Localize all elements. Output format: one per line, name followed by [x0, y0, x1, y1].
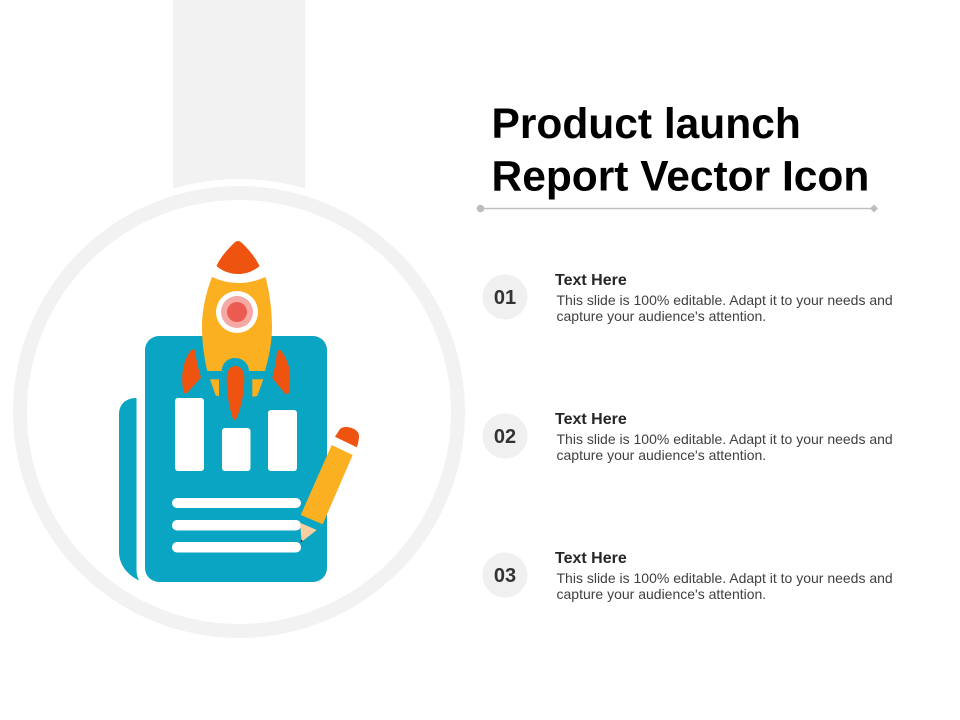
- divider: [477, 204, 878, 212]
- ring: [20, 193, 458, 631]
- number badge 01: 01: [494, 287, 516, 309]
- rocket legs: [210, 379, 263, 397]
- number badge 01: [482, 274, 528, 320]
- body 01: This slide is 100% editable. Adapt it to your needs and: [556, 292, 893, 308]
- heading 03: Text Here: [555, 550, 627, 567]
- item 01: [482, 272, 893, 324]
- body 01: [556, 292, 893, 324]
- heading 01: Text Here: [555, 272, 627, 289]
- report sheet: [145, 336, 327, 582]
- back page: [119, 398, 139, 580]
- rocket nose: [216, 241, 260, 274]
- title: Product launch: [492, 101, 801, 148]
- background band: [173, 0, 305, 188]
- rocket left fin: [182, 349, 201, 393]
- icon: rocket: [182, 241, 290, 420]
- body 02: [556, 431, 893, 463]
- body 01: capture your audience's attention.: [556, 308, 766, 324]
- body 03: This slide is 100% editable. Adapt it to your needs and: [556, 570, 893, 586]
- number badge 03: 03: [494, 565, 516, 587]
- title: Report Vector Icon: [492, 154, 869, 200]
- item 02: [482, 411, 893, 463]
- rocket centre flame: [227, 366, 244, 420]
- body 02: This slide is 100% editable. Adapt it to your needs and: [556, 431, 893, 447]
- body 03: [556, 570, 893, 602]
- item 03: [482, 550, 893, 602]
- pencil eraser: [335, 427, 359, 447]
- number badge 02: 02: [494, 426, 516, 448]
- text lines: [172, 498, 301, 552]
- icon: pencil: [300, 427, 359, 542]
- body 03: capture your audience's attention.: [556, 586, 766, 602]
- number badge 03: [482, 552, 528, 598]
- rocket window: [216, 291, 258, 333]
- bar chart: [175, 398, 297, 471]
- title: [492, 101, 869, 200]
- heading 02: Text Here: [555, 411, 627, 428]
- rocket body: [202, 277, 272, 371]
- number badge 02: [482, 414, 528, 458]
- body 02: capture your audience's attention.: [556, 447, 766, 463]
- pencil body: [301, 445, 353, 524]
- pencil tip: [300, 523, 317, 542]
- rocket right fin: [272, 350, 290, 394]
- icon: product launch report: [119, 241, 359, 582]
